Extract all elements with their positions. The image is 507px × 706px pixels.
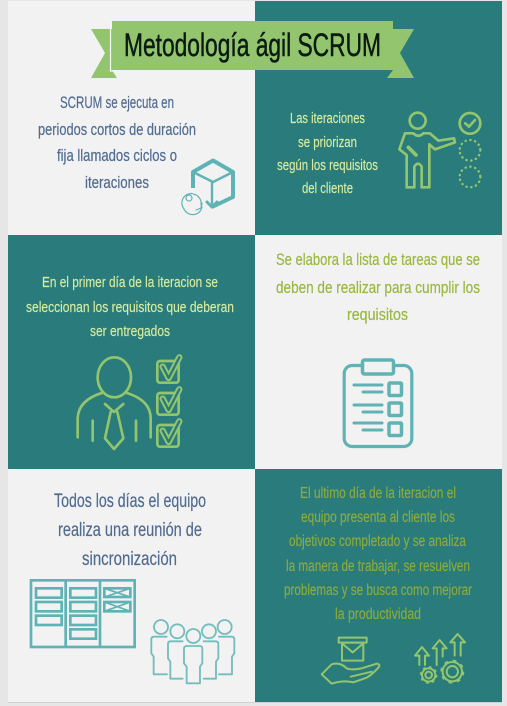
text: priorizan: Las iteraciones — [290, 110, 365, 127]
text: último día: la productividad — [335, 606, 421, 623]
icon: team of people — [151, 620, 234, 683]
ribbon tails — [91, 29, 414, 78]
text: último día — [284, 485, 472, 623]
panel: primer día — [8, 235, 255, 469]
icon: manager with checklist — [78, 357, 179, 449]
text: primer día: En el primer día de la iteracion se — [42, 274, 218, 291]
text: primer día: seleccionan los requisitos que deberan — [26, 299, 234, 316]
title text: Metodología ágil SCRUM — [124, 27, 381, 63]
text: primer día — [26, 274, 234, 340]
panel: lista de tareas — [255, 235, 502, 469]
panel: último día — [255, 469, 502, 702]
text: priorizan: según los requisitos — [277, 157, 378, 174]
text: priorizan — [277, 110, 378, 197]
icon: hand holding envelope box — [322, 638, 379, 684]
icon: clipboard — [344, 360, 412, 446]
text: priorizan: del cliente — [302, 180, 353, 197]
text: ciclos: periodos cortos de duración — [38, 121, 196, 139]
panel: ciclos — [8, 1, 255, 235]
text: reunión: sincronización — [82, 549, 177, 570]
text: reunión: Todos los días el equipo — [54, 491, 206, 512]
text: primer día: ser entregados — [90, 323, 170, 340]
panel: reunión — [8, 469, 255, 702]
icon: task board — [31, 580, 135, 647]
text: lista de tareas: requisitos — [347, 305, 408, 324]
icon: cube with cycle — [182, 160, 233, 215]
text: ciclos: iteraciones — [85, 174, 149, 192]
text: último día: El ultimo día de la iteracion el — [300, 485, 456, 502]
text: ciclos: SCRUM se ejecuta en — [60, 94, 174, 112]
text: reunión — [54, 491, 206, 570]
panel: priorizan — [255, 1, 502, 235]
text: priorizan: se priorizan — [298, 134, 357, 151]
icon: person pointing at checklist — [399, 113, 480, 187]
text: reunión: realiza una reunión de — [58, 520, 202, 541]
text: último día: equipo presenta al cliente los — [301, 509, 455, 526]
text: ciclos — [38, 94, 196, 192]
text: lista de tareas — [276, 250, 480, 324]
icon: arrows and gears — [415, 634, 465, 682]
title ribbon — [91, 21, 414, 78]
text: ciclos: fija llamados ciclos o — [57, 147, 177, 165]
